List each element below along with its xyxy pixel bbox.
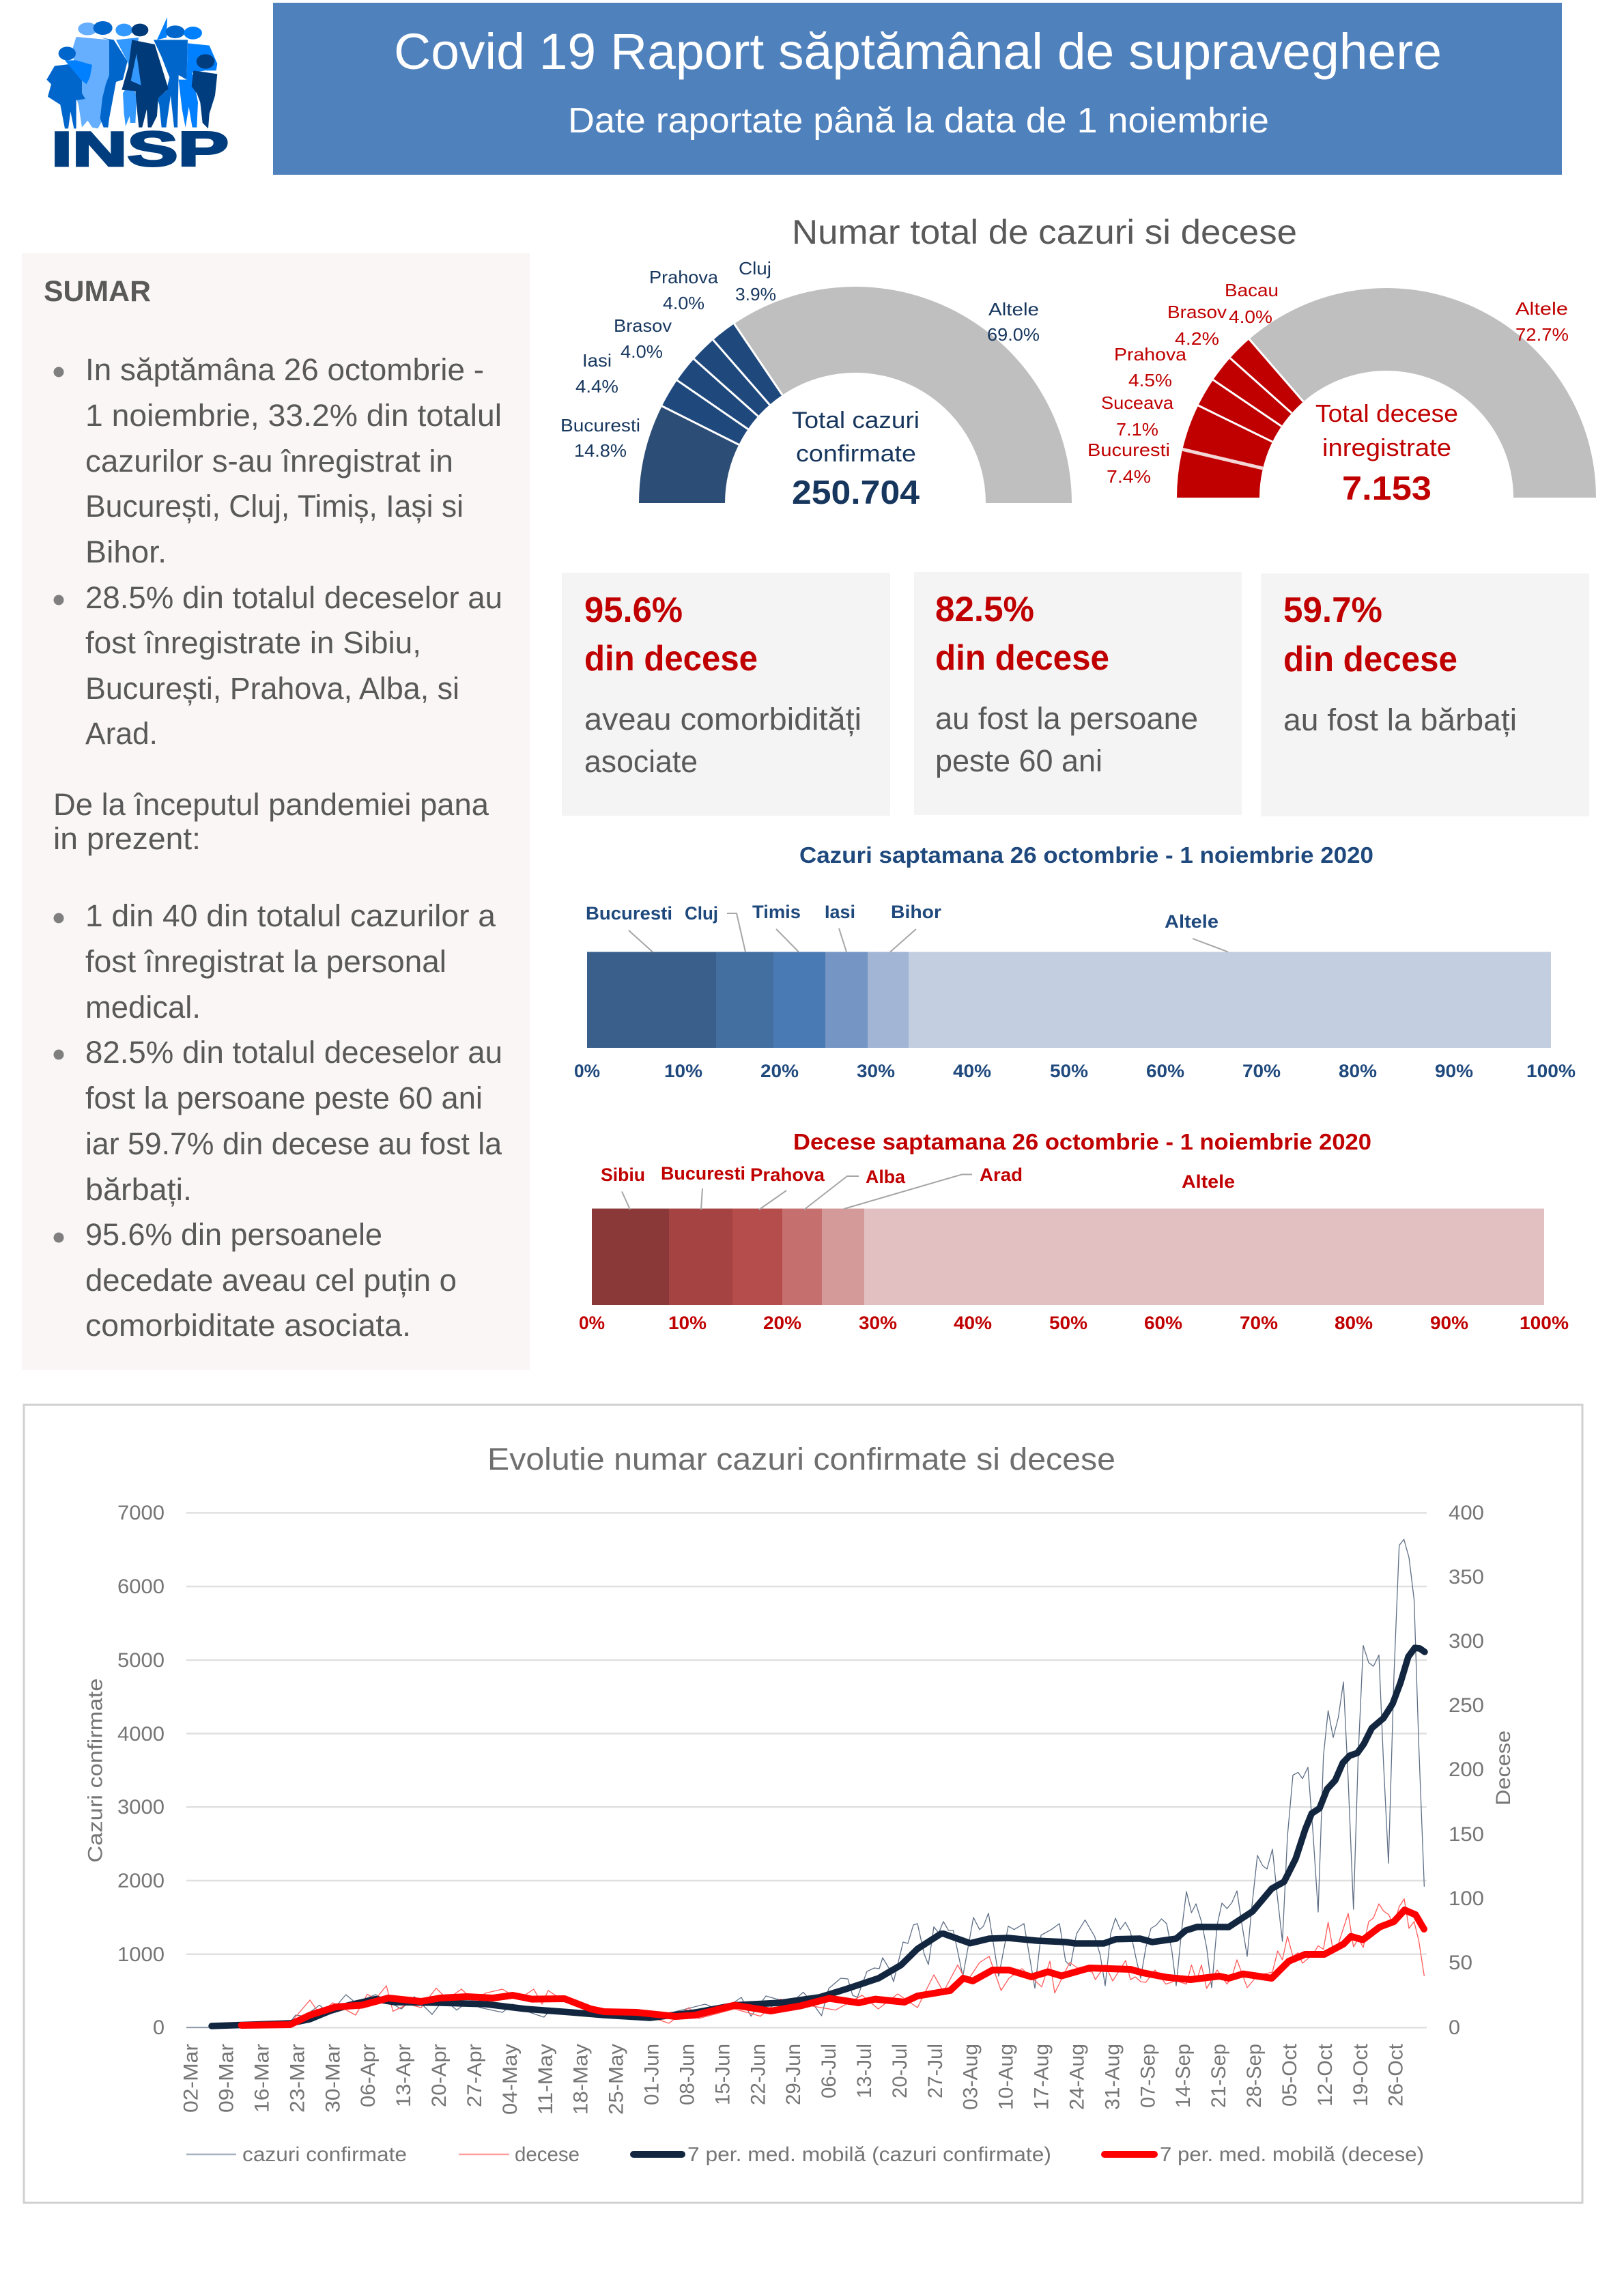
gauge centre total: confirmate <box>796 441 916 467</box>
bar axis labels: 20% <box>763 1313 801 1333</box>
date axis labels: 01-Jun <box>640 2044 664 2105</box>
right axis labels: 100 <box>1449 1887 1484 1910</box>
date axis labels: 06-Jul <box>818 2044 840 2098</box>
sumar intro: since the start: De la începutul pandemiei pana <box>53 787 489 822</box>
logo: INSP <box>46 17 229 177</box>
gauge centre total: inregistrate <box>1322 433 1451 461</box>
date axis labels: 15-Jun <box>711 2044 734 2105</box>
date axis labels: 04-May <box>499 2044 522 2115</box>
date axis labels: 09-Mar <box>216 2044 238 2113</box>
gauge labels: 4.4% <box>575 376 618 397</box>
gauge labels: Iasi <box>582 350 612 371</box>
sumar bullet list: week: 28.5% din totalul deceselor au <box>85 580 502 615</box>
sumar bullet list: week: 1 noiembrie, 33.2% din totalul <box>85 398 502 433</box>
gauge centre total: 7.153 <box>1342 470 1431 507</box>
left axis labels: 0 <box>153 2016 165 2039</box>
gauge labels: 4.0% <box>1229 306 1272 327</box>
date axis labels: 23-Mar <box>286 2044 309 2113</box>
gauge centre total <box>1315 399 1458 507</box>
bar axis labels: 60% <box>1144 1313 1182 1333</box>
card: over 60: peste 60 ani <box>935 743 1102 778</box>
right axis labels: 400 <box>1449 1502 1484 1524</box>
right axis labels: 150 <box>1449 1823 1484 1846</box>
gauge labels <box>560 258 1040 461</box>
logo figures <box>46 17 217 128</box>
gauge chart: total cases <box>560 258 1072 511</box>
date axis labels: 22-Jun <box>747 2044 769 2105</box>
gauge labels: Altele <box>988 299 1039 319</box>
date axis labels: 31-Aug <box>1101 2044 1124 2110</box>
right axis labels: 200 <box>1449 1758 1484 1781</box>
gauge segments <box>639 287 1072 503</box>
date axis labels: 12-Oct <box>1314 2043 1337 2107</box>
gauge labels: 69.0% <box>987 324 1040 345</box>
bar segment labels and leader lines <box>586 902 1228 952</box>
date axis labels: 20-Apr <box>428 2044 451 2107</box>
sumar bullet list: total: 95.6% din persoanele <box>85 1217 382 1252</box>
bar segment labels and leader lines: Bucuresti <box>586 903 672 924</box>
legend: decese <box>515 2143 580 2166</box>
sumar bullet list: week: fost înregistrate in Sibiu, <box>85 625 421 660</box>
bar axis labels: 40% <box>954 1313 992 1333</box>
card: comorbidities: din decese <box>584 639 758 679</box>
bar segment labels and leader lines: Cluj <box>685 903 718 924</box>
date axis labels: 29-Jun <box>782 2044 805 2105</box>
gauge centre total: 250.704 <box>792 474 920 511</box>
bar segment labels and leader lines: Sibiu <box>601 1165 645 1185</box>
legend: cazuri confirmate <box>242 2143 407 2166</box>
card: comorbidities: 95.6% <box>584 590 683 630</box>
gauge labels <box>1087 280 1569 487</box>
sumar bullet list: total: comorbiditate asociata. <box>85 1308 411 1343</box>
gauge labels: 7.1% <box>1116 419 1158 440</box>
title: Covid 19 Raport săptămânal de supraveghere <box>394 23 1442 80</box>
sumar bullet list: week: Arad. <box>85 716 158 751</box>
card: men: din decese <box>1283 640 1457 679</box>
bar axis labels: 40% <box>953 1061 991 1081</box>
gauge chart: total deaths <box>1087 280 1596 507</box>
header banner <box>273 3 1562 175</box>
sumar bullet list: week: cazurilor s-au înregistrat in <box>85 444 453 479</box>
bar axis labels: 70% <box>1242 1061 1281 1081</box>
date axis labels: 08-Jun <box>676 2044 698 2105</box>
left axis labels: 6000 <box>117 1575 165 1598</box>
date axis labels: 16-Mar <box>251 2044 273 2113</box>
date axis labels <box>180 2043 1408 2115</box>
sumar bullet list: total: 1 din 40 din totalul cazurilor a <box>85 898 496 933</box>
date axis labels: 17-Aug <box>1031 2044 1053 2110</box>
bar axis labels <box>579 1313 1569 1333</box>
sumar intro: since the start <box>53 787 489 856</box>
bar axis labels: 20% <box>760 1061 799 1081</box>
date axis labels: 25-May <box>606 2044 628 2115</box>
right axis labels: 350 <box>1449 1566 1484 1588</box>
bar segment labels and leader lines: Altele <box>1165 911 1219 932</box>
right axis title: Decese <box>1492 1730 1515 1806</box>
date axis labels: 19-Oct <box>1350 2043 1372 2107</box>
sumar bullet list: total: 82.5% din totalul deceselor au <box>85 1035 502 1070</box>
date axis labels: 14-Sep <box>1172 2044 1195 2108</box>
date axis labels: 13-Apr <box>393 2044 415 2107</box>
gauge labels: 72.7% <box>1515 324 1569 345</box>
gauge labels: 4.5% <box>1128 370 1172 390</box>
bar axis labels: 90% <box>1435 1061 1473 1081</box>
bar chart: weekly cases <box>574 842 1576 1081</box>
date axis labels: 07-Sep <box>1137 2044 1159 2108</box>
sumar bullet list: total: decedate aveau cel puțin o <box>85 1263 457 1298</box>
bar axis labels: 80% <box>1339 1061 1377 1081</box>
date axis labels: 28-Sep <box>1243 2044 1266 2108</box>
line: daily confirmed cases <box>186 1539 1424 2027</box>
right axis labels <box>1449 1502 1484 2039</box>
left axis title: Cazuri confirmate <box>85 1679 106 1863</box>
gauge centre total: Total decese <box>1315 399 1458 427</box>
gauge labels: Prahova <box>649 267 719 287</box>
bar axis labels: 10% <box>664 1061 702 1081</box>
bar axis labels: 100% <box>1526 1061 1576 1081</box>
bar chart: weekly deaths <box>579 1129 1569 1333</box>
bar segment labels and leader lines: Prahova <box>750 1165 825 1185</box>
bar axis labels: 50% <box>1049 1313 1087 1333</box>
card: men <box>1261 573 1589 816</box>
gauge labels: Prahova <box>1114 344 1187 365</box>
bar segment labels and leader lines: Altele <box>1182 1171 1235 1192</box>
bar chart title: Decese saptamana 26 octombrie - 1 noiembrie 2020 <box>793 1129 1371 1154</box>
sumar bullet list: total: medical. <box>85 990 201 1025</box>
date axis labels: 03-Aug <box>960 2044 982 2110</box>
card: over 60 <box>914 572 1242 815</box>
gauge centre total <box>792 408 920 511</box>
date axis labels: 06-Apr <box>357 2044 380 2107</box>
chart title: Evolutie numar cazuri confirmate si decese <box>487 1442 1115 1477</box>
bar axis labels: 30% <box>857 1061 895 1081</box>
left axis labels <box>117 1502 165 2039</box>
heading: total cases and deaths: Numar total de cazuri si decese <box>792 213 1297 251</box>
sumar bullet list: week: Bihor. <box>85 534 167 569</box>
card: comorbidities <box>562 573 890 816</box>
date axis labels: 05-Oct <box>1279 2043 1301 2107</box>
sumar intro: since the start: in prezent: <box>53 821 201 856</box>
bar axis labels: 0% <box>574 1061 600 1081</box>
stacked bar <box>587 952 1551 1048</box>
sumar bullet list: total: bărbați. <box>85 1172 192 1207</box>
bar axis labels: 70% <box>1240 1313 1278 1333</box>
gauge labels: 4.0% <box>621 341 663 362</box>
bar segment labels and leader lines: Alba <box>866 1167 906 1187</box>
legend: 7 per. med. mobilă (decese) <box>1160 2143 1424 2166</box>
gauge labels: 7.4% <box>1107 466 1151 487</box>
left axis labels: 2000 <box>117 1870 165 1892</box>
left axis labels: 5000 <box>117 1649 165 1672</box>
date axis labels: 18-May <box>570 2044 593 2115</box>
gauge labels: Brasov <box>1167 302 1227 322</box>
date axis labels: 27-Jul <box>924 2044 947 2098</box>
logo wordmark: INSP <box>51 123 229 177</box>
right axis labels: 50 <box>1449 1952 1472 1974</box>
card: over 60: din decese <box>935 638 1109 678</box>
sumar bullet list: total: fost înregistrat la personal <box>85 944 446 979</box>
bar axis labels: 100% <box>1520 1313 1569 1333</box>
bar segment labels and leader lines: Bihor <box>891 902 942 922</box>
date axis labels: 27-Apr <box>464 2044 486 2107</box>
panel: sumar <box>22 253 530 1370</box>
date axis labels: 26-Oct <box>1385 2043 1408 2107</box>
gauge labels: Bucuresti <box>560 415 640 436</box>
legend: 7 per. med. mobilă (cazuri confirmate) <box>687 2143 1051 2166</box>
bar axis labels: 80% <box>1335 1313 1373 1333</box>
sumar bullet list: total: iar 59.7% din decese au fost la <box>85 1126 502 1161</box>
line: 7-day moving average, deaths <box>242 1910 1424 2025</box>
bar segment labels and leader lines: Bucuresti <box>661 1163 745 1184</box>
date axis labels: 02-Mar <box>180 2044 203 2113</box>
date axis labels: 10-Aug <box>995 2044 1018 2110</box>
bar axis labels: 60% <box>1146 1061 1184 1081</box>
gauge labels: 4.0% <box>663 293 704 313</box>
card: men: au fost la bărbați <box>1283 702 1517 737</box>
right axis labels: 0 <box>1449 2016 1460 2039</box>
bar segment labels and leader lines: Iasi <box>825 902 855 922</box>
card: over 60: au fost la persoane <box>935 701 1198 736</box>
subtitle: Date raportate până la data de 1 noiembrie <box>568 101 1269 141</box>
date axis labels: 21-Sep <box>1208 2044 1230 2108</box>
card: comorbidities: asociate <box>584 744 698 779</box>
bar axis labels: 30% <box>859 1313 897 1333</box>
gauge segments <box>1177 288 1596 498</box>
bar segment labels and leader lines: Timis <box>752 902 801 922</box>
gauge labels: 14.8% <box>574 440 627 461</box>
sumar bullet list: total <box>53 898 502 1343</box>
stacked bar <box>592 1208 1544 1305</box>
right axis labels: 300 <box>1449 1630 1484 1653</box>
bar axis labels: 0% <box>579 1313 605 1333</box>
sumar bullet list: week: București, Cluj, Timiș, Iași si <box>85 489 464 524</box>
sumar bullet list: week: In săptămâna 26 octombrie - <box>85 352 484 387</box>
bar segment labels and leader lines: Arad <box>980 1165 1023 1185</box>
left axis labels: 1000 <box>117 1943 165 1966</box>
right axis labels: 250 <box>1449 1694 1484 1717</box>
left axis labels: 4000 <box>117 1723 165 1745</box>
line: 7-day moving average, cases <box>212 1648 1425 2026</box>
bar axis labels: 10% <box>668 1313 707 1333</box>
gauge labels: Bucuresti <box>1087 440 1170 460</box>
sumar bullet list: total: fost la persoane peste 60 ani <box>85 1081 483 1115</box>
sumar bullet list: week <box>53 352 502 751</box>
gauge labels: Suceava <box>1101 393 1174 413</box>
left axis labels: 7000 <box>117 1502 165 1524</box>
date axis labels: 30-Mar <box>322 2044 344 2113</box>
gauge labels: Cluj <box>739 258 771 279</box>
sumar bullet list: week: București, Prahova, Alba, si <box>85 671 459 706</box>
gauge labels: 3.9% <box>735 284 776 304</box>
card: men: 59.7% <box>1283 590 1382 630</box>
date axis labels: 20-Jul <box>889 2044 911 2098</box>
date axis labels: 13-Jul <box>853 2044 876 2098</box>
gauge labels: Bacau <box>1225 280 1279 300</box>
bar axis labels: 50% <box>1050 1061 1088 1081</box>
panel: evolution line chart <box>24 1405 1582 2203</box>
gauge labels: 4.2% <box>1175 328 1219 349</box>
left axis labels: 3000 <box>117 1796 165 1819</box>
date axis labels: 24-Aug <box>1066 2044 1088 2110</box>
legend <box>186 2143 1424 2166</box>
line: daily deaths <box>242 1899 1424 2026</box>
card: comorbidities: aveau comorbidități <box>584 702 861 737</box>
gauge labels: Brasov <box>614 315 672 336</box>
bar chart title: Cazuri saptamana 26 octombrie - 1 noiembrie 2020 <box>799 842 1373 868</box>
gauge centre total: Total cazuri <box>792 408 920 433</box>
gauge labels: Altele <box>1515 298 1568 319</box>
date axis labels: 11-May <box>535 2044 557 2115</box>
sumar heading: SUMAR <box>44 275 151 308</box>
card: over 60: 82.5% <box>935 590 1034 629</box>
bar axis labels: 90% <box>1430 1313 1468 1333</box>
bar axis labels <box>574 1061 1576 1081</box>
bar segment labels and leader lines <box>601 1163 1235 1210</box>
